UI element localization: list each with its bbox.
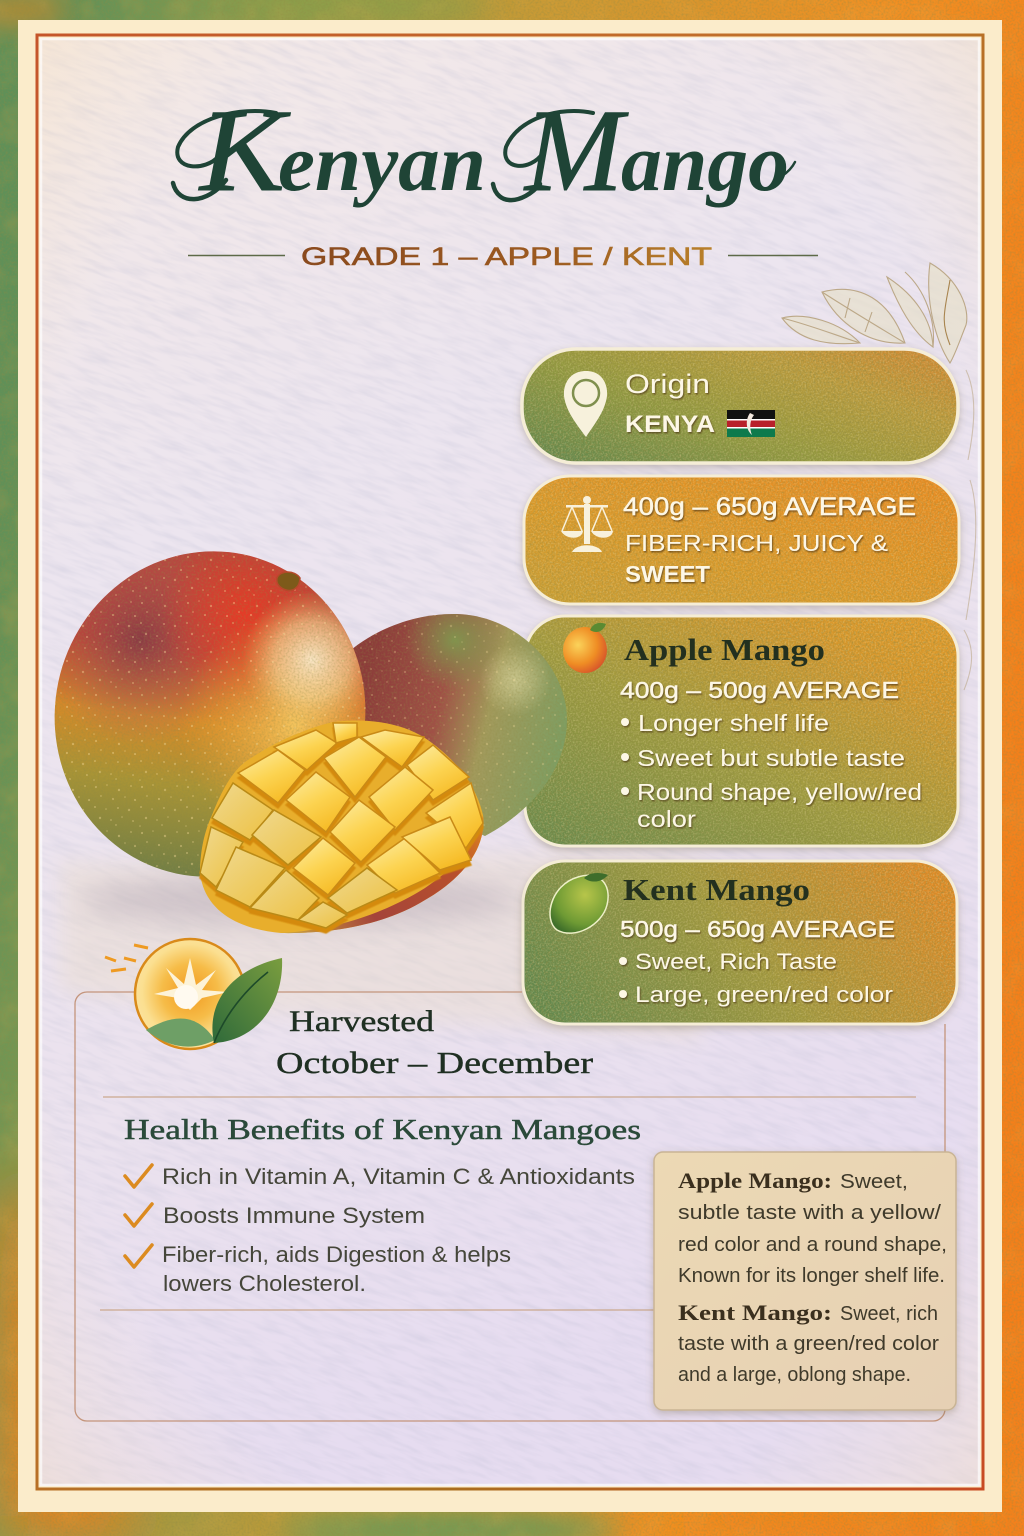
icon: location pin xyxy=(564,371,607,437)
apple mango details: Round shape, yellow/red xyxy=(637,779,922,805)
benefits list: lowers Cholesterol. xyxy=(163,1271,366,1296)
note card: variety comparison: and a large, oblong shape. xyxy=(678,1364,911,1386)
kent mango details: Large, green/red color xyxy=(635,982,893,1007)
origin text: KENYA xyxy=(625,411,715,438)
apple mango details: Sweet but subtle taste xyxy=(637,745,905,771)
pill: weight and quality xyxy=(524,476,959,604)
note card: variety comparison: subtle taste with a yellow/ xyxy=(678,1202,942,1224)
whole mango, front left xyxy=(50,548,370,880)
icon: scales xyxy=(561,496,613,552)
note card: variety comparison: red color and a round shape, xyxy=(678,1234,947,1256)
kent mango details xyxy=(619,916,895,1007)
apple mango details: Longer shelf life xyxy=(638,710,829,736)
weight text: SWEET xyxy=(625,561,710,587)
note card: variety comparison: Sweet, rich xyxy=(840,1303,938,1325)
icon: Kenyan flag xyxy=(727,410,775,437)
note card: variety comparison: Sweet, xyxy=(840,1171,908,1193)
bottom information panel outline xyxy=(75,992,945,1421)
note card: variety comparison: Known for its longer shelf life. xyxy=(678,1265,945,1287)
note card: variety comparison: Kent Mango: xyxy=(678,1300,832,1325)
note card: variety comparison: taste with a green/red color xyxy=(678,1333,939,1355)
title: M xyxy=(523,85,629,216)
apple mango details: color xyxy=(637,806,696,832)
subtitle: grade: GRADE 1 – APPLE / KENT xyxy=(301,243,712,271)
benefits list: Rich in Vitamin A, Vitamin C & Antioxidants xyxy=(162,1164,635,1189)
mango illustration xyxy=(50,548,572,933)
title: K xyxy=(198,85,291,216)
origin text xyxy=(625,369,715,438)
icon: harvest sun and leaf xyxy=(105,939,282,1049)
harvest text xyxy=(276,1005,594,1080)
icon: check xyxy=(125,1204,152,1226)
note card: variety comparison xyxy=(654,1152,956,1410)
weight text: FIBER-RICH, JUICY & xyxy=(625,530,888,556)
pill: Kent Mango xyxy=(523,861,957,1024)
apple mango details xyxy=(620,677,922,832)
harvest text: Harvested xyxy=(289,1005,434,1038)
weight text xyxy=(623,493,916,587)
benefits list: Fiber-rich, aids Digestion & helps xyxy=(162,1242,511,1267)
benefits list xyxy=(125,1164,635,1296)
pill: Apple Mango xyxy=(525,616,958,846)
note card: variety comparison: Apple Mango: xyxy=(678,1168,832,1193)
heading: Apple Mango: Apple Mango xyxy=(624,632,825,667)
origin text: Origin xyxy=(625,369,710,399)
title: enyan xyxy=(278,117,486,208)
cut hedgehog mango half xyxy=(200,721,483,933)
whole mango, back right xyxy=(353,614,567,836)
icon: check xyxy=(125,1165,152,1187)
kent mango details: 500g – 650g AVERAGE xyxy=(620,916,895,942)
benefits list: Boosts Immune System xyxy=(163,1203,425,1228)
title: ango xyxy=(621,117,789,208)
mango stem xyxy=(277,572,300,590)
title xyxy=(173,85,795,216)
icon: apple mango xyxy=(563,623,607,673)
heading: health benefits: Health Benefits of Kenyan Mangoes xyxy=(124,1114,641,1146)
kent mango details: Sweet, Rich Taste xyxy=(635,949,837,974)
icon: check xyxy=(125,1245,152,1267)
decorative leaf sketches top right xyxy=(782,263,976,690)
icon: kent mango xyxy=(550,873,608,933)
pill: origin xyxy=(522,349,958,463)
apple mango details: 400g – 500g AVERAGE xyxy=(620,677,899,703)
weight text: 400g – 650g AVERAGE xyxy=(623,493,916,521)
ground shadow xyxy=(80,876,520,924)
harvest text: October – December xyxy=(276,1045,594,1080)
heading: Kent Mango: Kent Mango xyxy=(623,872,810,907)
